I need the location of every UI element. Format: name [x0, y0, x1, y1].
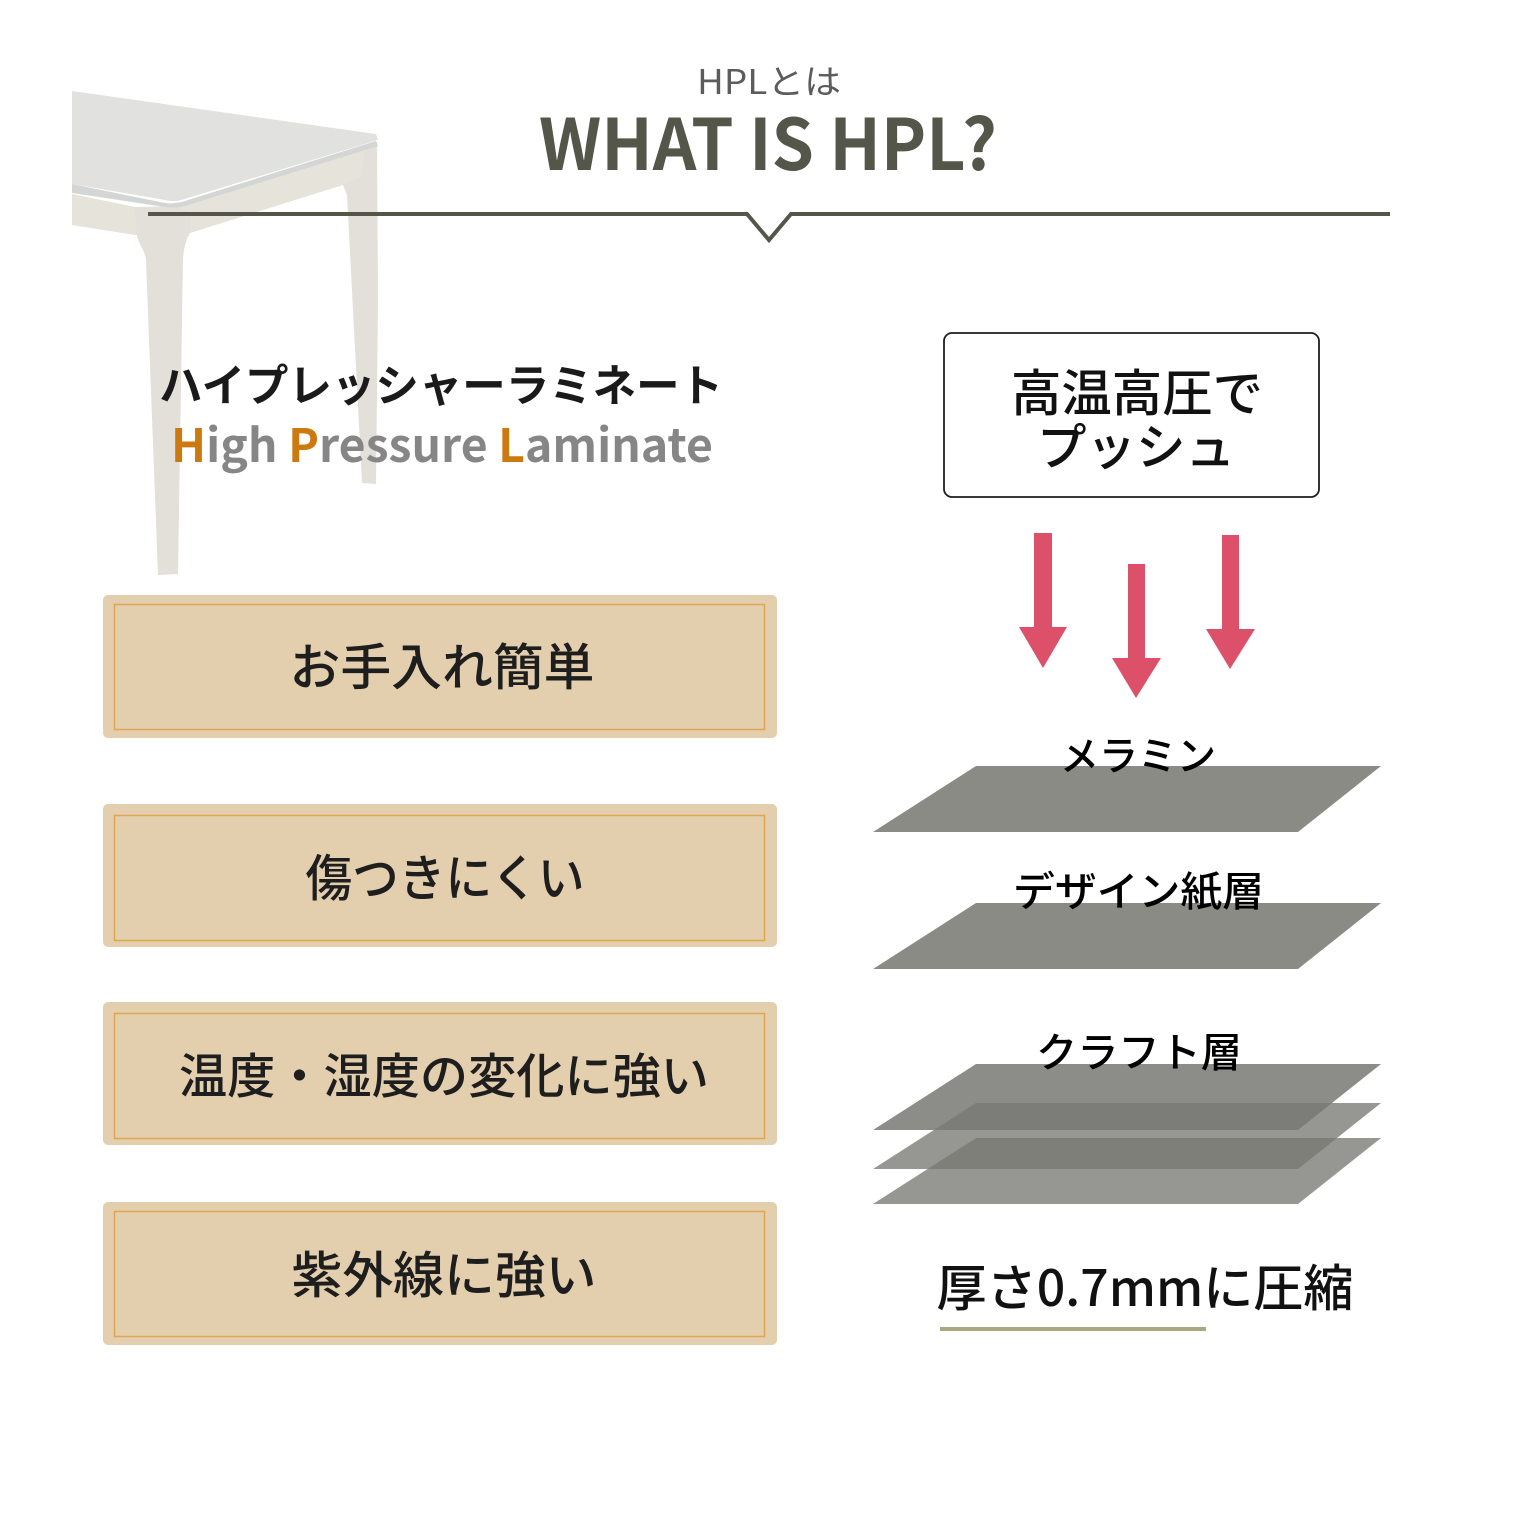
callout: press at high temperature [944, 333, 1319, 497]
header [148, 55, 1390, 240]
layer: kraft stack: クラフト層 [1036, 1019, 1242, 1079]
panel: scratch resistant [103, 804, 777, 947]
subtitle: HPLとは [697, 55, 841, 104]
panel: easy care: お手入れ簡単 [290, 628, 594, 700]
aprons [72, 144, 377, 235]
right leg [343, 142, 378, 484]
panel: easy care [103, 595, 777, 738]
layer: design paper: デザイン紙層 [1013, 858, 1264, 918]
heading: high pressure laminate [159, 350, 723, 476]
callout: press at high temperature: 高温高圧で [1011, 354, 1263, 426]
callout: press at high temperature: プッシュ [1037, 408, 1235, 480]
front leg [135, 208, 190, 575]
title: WHAT IS HPL? [539, 89, 997, 191]
heading: high pressure laminate: High Pressure Laminate [171, 410, 713, 476]
table top surface [72, 91, 378, 201]
layer: melamine [873, 724, 1381, 832]
arrows: pressure [1019, 533, 1255, 698]
table photo [72, 91, 378, 575]
header rule with notch [148, 214, 1390, 240]
table top edge [72, 141, 378, 208]
panel: temperature and humidity [103, 1002, 777, 1145]
panel: UV resistant: 紫外線に強い [292, 1236, 596, 1308]
layer: design paper [873, 858, 1381, 969]
heading: high pressure laminate: ハイプレッシャーラミネート [159, 350, 723, 414]
panel: UV resistant [103, 1202, 777, 1345]
layer: kraft stack [873, 1019, 1381, 1204]
panel: temperature and humidity: 温度・湿度の変化に強い [179, 1037, 709, 1107]
layer: melamine: メラミン [1060, 724, 1216, 782]
caption: compressed to 0.7mm: 厚さ0.7mmに圧縮 [936, 1249, 1354, 1321]
panel: scratch resistant: 傷つきにくい [306, 839, 584, 911]
